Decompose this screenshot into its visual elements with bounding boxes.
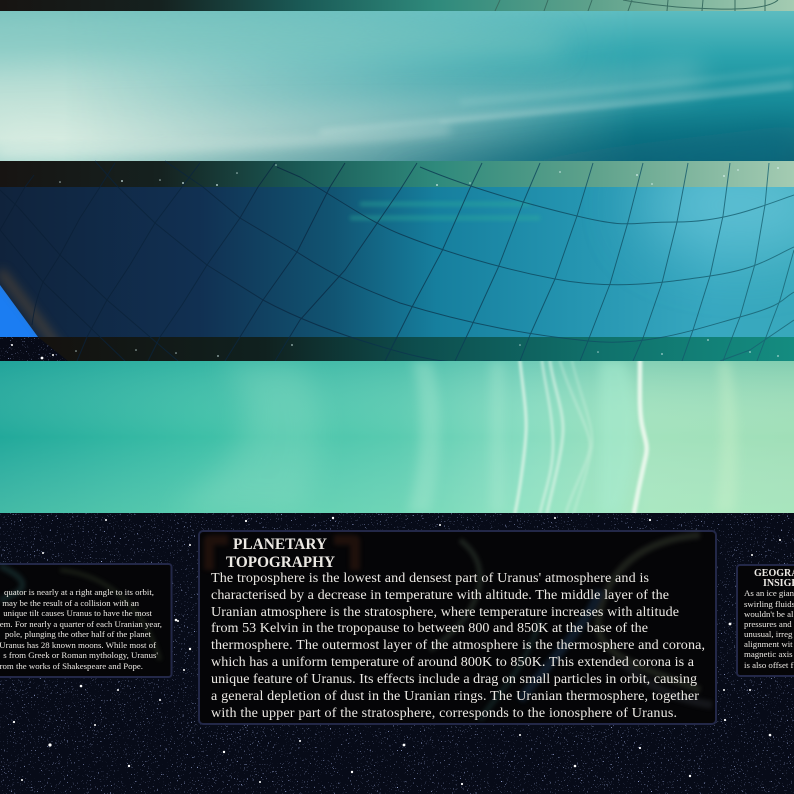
body text [211, 570, 705, 721]
left panel body text: s from Greek or Roman mythology, Uranus' [3, 650, 158, 660]
body text: a general depletion of dust in the Uranian rings. The Uranian thermosphere, together [211, 688, 699, 704]
heading ornament [204, 535, 360, 570]
body text: thermosphere. The outermost layer of the atmosphere is the thermosphere and corona, [211, 637, 705, 653]
body text: which has a uniform temperature of around 800K to 850K. This extended corona is a [211, 654, 695, 670]
right panel body text: swirling fluids [744, 599, 794, 609]
right panel body text [744, 588, 794, 670]
body text: with the upper part of the stratosphere, corresponds to the ionosphere of Uranus. [211, 705, 677, 721]
dark overlay band below the grid [38, 337, 794, 361]
stars over the dark bands [59, 164, 779, 357]
left panel body text: quator is nearly at a right angle to its orbit, [4, 587, 154, 597]
band 2: planet surface with grid [0, 187, 794, 337]
right panel body text: magnetic axis [744, 649, 793, 659]
photo band 1: atmosphere streaks [0, 11, 794, 175]
body text: unique feature of Uranus. Its effects include a drag on small particles in orbit, causing [211, 671, 697, 687]
planet limb glow [0, 268, 61, 337]
blue wedge of space [0, 285, 38, 337]
heading [226, 536, 335, 571]
right panel heading [754, 568, 794, 589]
left panel body text: em. For nearly a quarter of each Uranian year, [0, 619, 162, 629]
left panel body text: may be the result of a collision with an [2, 598, 140, 608]
dark overlay band above the grid [0, 161, 794, 187]
right panel body text: is also offset f [744, 660, 794, 670]
panel: planetary topography [199, 531, 716, 724]
panel swirl decoration [430, 535, 712, 720]
left panel body text [0, 587, 162, 671]
right panel body text: wouldn't be al [744, 609, 794, 619]
right panel body text: alignment wit [744, 639, 793, 649]
body text: from 53 Kelvin in the tropopause to between 800 and 850K at the base of the [211, 620, 648, 636]
left panel body text: pole, plunging the other half of the planet [5, 629, 152, 639]
top image strip [0, 0, 794, 11]
latitude and longitude grid [0, 161, 794, 362]
left panel body text: rom the works of Shakespeare and Pope. [0, 661, 143, 671]
right panel body text: pressures and [744, 619, 792, 629]
panel: left text panel (cut off at page edge) [0, 564, 172, 677]
right panel body text: As an ice gian [744, 588, 794, 598]
left panel body text: Uranus has 28 known moons. While most of [0, 640, 156, 650]
body text: characterised by a decrease in temperature with altitude. The middle layer of the [211, 587, 669, 603]
heading: TOPOGRAPHY [226, 554, 335, 571]
left panel body text: unique tilt causes Uranus to have the most [3, 608, 153, 618]
right panel body text: unusual, irreg [744, 629, 793, 639]
heading: PLANETARY [233, 536, 327, 553]
body text: The troposphere is the lowest and densest part of Uranus' atmosphere and is [211, 570, 649, 586]
panel: right text panel (cut off at page edge) [737, 565, 794, 676]
body text: Uranian atmosphere is the stratosphere, where temperature increases with altitude [211, 604, 679, 620]
photo band 3: rings with light streaks [0, 361, 794, 513]
